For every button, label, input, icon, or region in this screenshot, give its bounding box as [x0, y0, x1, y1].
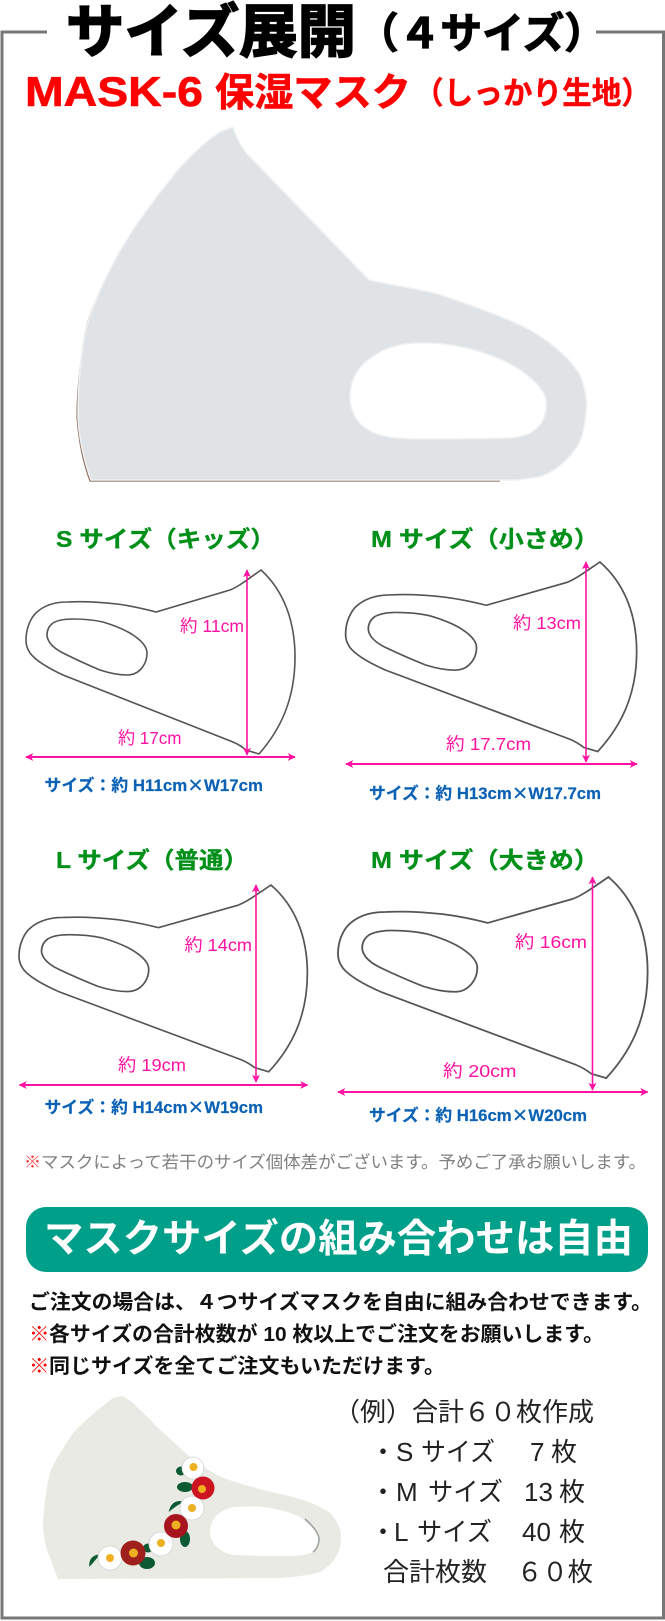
M small size diagram	[346, 562, 637, 764]
L size diagram: 約 19cm	[118, 1055, 186, 1075]
order instructions: ※	[29, 1355, 50, 1378]
S size heading: S サイズ（キッズ）	[56, 526, 275, 552]
S size diagram: 約 11cm	[180, 616, 244, 636]
M large size dimensions: サイズ：約 H16cm×W20cm	[369, 1102, 587, 1126]
L quantity: ・	[370, 1517, 396, 1547]
flower chain	[90, 1457, 214, 1570]
title	[66, 0, 606, 65]
green banner	[26, 1207, 648, 1272]
S quantity: サイズ	[421, 1437, 495, 1467]
S quantity: S	[396, 1437, 413, 1467]
L quantity: 枚	[559, 1517, 585, 1547]
M small size diagram: 約 13cm	[513, 613, 581, 633]
note about individual variation: マスクによって若干のサイズ個体差がございます。予めご了承お願いします。	[41, 1152, 646, 1172]
L quantity: サイズ	[417, 1517, 492, 1547]
example order list	[334, 1397, 594, 1587]
note about individual variation: ※	[24, 1153, 41, 1172]
L quantity: L	[394, 1517, 408, 1547]
order instructions: ※	[29, 1323, 50, 1346]
M quantity	[370, 1477, 585, 1507]
S size dimensions: サイズ：約 H11cm×W17cm	[44, 772, 263, 796]
title: （４サイズ）	[357, 10, 606, 57]
L size heading: L サイズ（普通）	[56, 847, 248, 873]
order instructions: 同じサイズを全てご注文もいただけます。	[49, 1354, 445, 1378]
S quantity: 7	[530, 1437, 544, 1467]
S quantity: 枚	[551, 1437, 577, 1467]
S quantity: ・	[370, 1437, 396, 1467]
subtitle: MASK-6	[25, 68, 203, 115]
total quantity: ６０枚	[517, 1557, 593, 1587]
total quantity: 合計枚数	[383, 1557, 487, 1587]
M quantity: サイズ	[428, 1477, 503, 1507]
S quantity	[370, 1437, 577, 1467]
M large size diagram	[338, 877, 648, 1092]
subtitle: 保湿マスク	[215, 72, 411, 115]
L size diagram: 約 14cm	[184, 935, 252, 955]
main mask photo	[77, 127, 587, 481]
L quantity: 40	[522, 1517, 551, 1547]
flower mask photo	[43, 1396, 341, 1579]
M quantity: 枚	[559, 1477, 585, 1507]
S size diagram: 約 17cm	[118, 728, 182, 748]
M quantity: 13	[524, 1477, 553, 1507]
M large size heading: M サイズ（大きめ）	[371, 847, 599, 873]
subtitle: （しっかり生地）	[414, 76, 651, 111]
title: サイズ展開	[66, 0, 356, 65]
L quantity	[370, 1517, 585, 1547]
S size diagram	[26, 570, 295, 757]
order instructions: 各サイズの合計枚数が 10 枚以上でご注文をお願いします。	[49, 1322, 604, 1346]
subtitle	[25, 68, 651, 115]
M large size diagram: 約 16cm	[515, 932, 587, 952]
L size diagram	[19, 885, 308, 1085]
example heading: （例）合計６０枚作成	[334, 1397, 594, 1427]
M quantity: ・	[370, 1477, 396, 1507]
M small size heading: M サイズ（小さめ）	[371, 526, 599, 552]
M quantity: M	[396, 1477, 418, 1507]
M small size diagram: 約 17.7cm	[446, 734, 531, 754]
M small size dimensions: サイズ：約 H13cm×W17.7cm	[369, 780, 601, 804]
M large size diagram: 約 20cm	[443, 1061, 516, 1081]
order instructions	[29, 1290, 652, 1378]
green banner: マスクサイズの組み合わせは自由	[44, 1218, 633, 1261]
total quantity	[383, 1557, 593, 1587]
order instructions: ご注文の場合は、４つサイズマスクを自由に組み合わせできます。	[29, 1290, 652, 1314]
L size dimensions: サイズ：約 H14cm×W19cm	[44, 1094, 263, 1118]
